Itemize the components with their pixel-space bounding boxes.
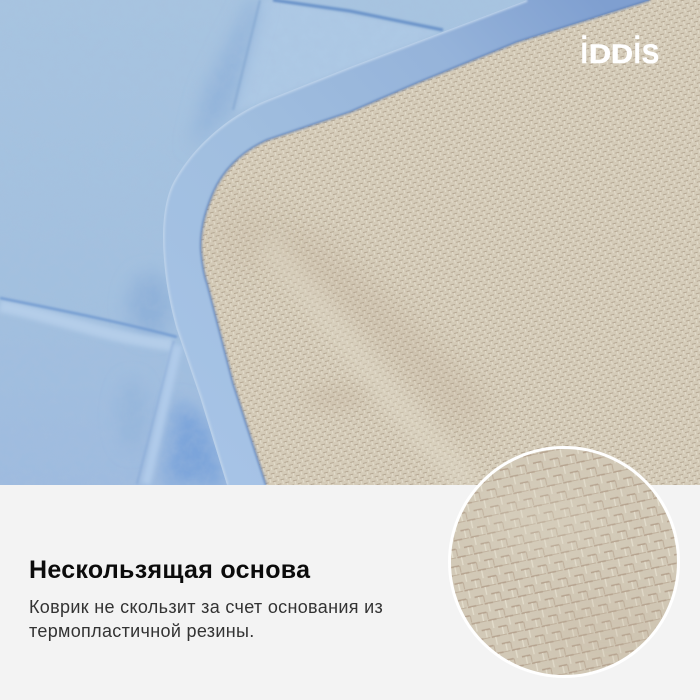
seam: lower diagonal — [137, 341, 178, 484]
mat hem border — [163, 0, 700, 485]
underside edge line — [201, 0, 650, 485]
logo: IDDIS: S — [642, 39, 659, 69]
logo: IDDIS: i — [580, 30, 588, 72]
description text — [29, 597, 383, 641]
beige anti-slip underside — [201, 0, 700, 485]
circle tonal shading — [483, 492, 650, 656]
blue plush surface — [0, 0, 526, 485]
logo: IDDIS — [580, 30, 659, 72]
seam: upper vertical — [233, 0, 260, 110]
logo: IDDIS: DD — [589, 39, 633, 69]
heading: Нескользящая основа — [29, 556, 310, 584]
quilted upper-right pad — [251, 62, 346, 100]
soft seam shadows — [128, 6, 260, 432]
hem outer highlight — [163, 0, 527, 485]
deep blue shadow beside hem — [164, 400, 228, 485]
magnified texture circle — [448, 446, 680, 678]
logo: IDDIS: i — [633, 30, 641, 72]
fleece texture — [182, 462, 191, 466]
description text: термопластичной резины. — [29, 621, 255, 641]
seam: top right — [273, 0, 443, 30]
underside folds and stains — [236, 221, 479, 485]
seam: left horizontal — [0, 298, 177, 345]
description text: Коврик не скользит за счет основания из — [29, 597, 383, 617]
panel: photo of bath mat — [0, 0, 700, 485]
